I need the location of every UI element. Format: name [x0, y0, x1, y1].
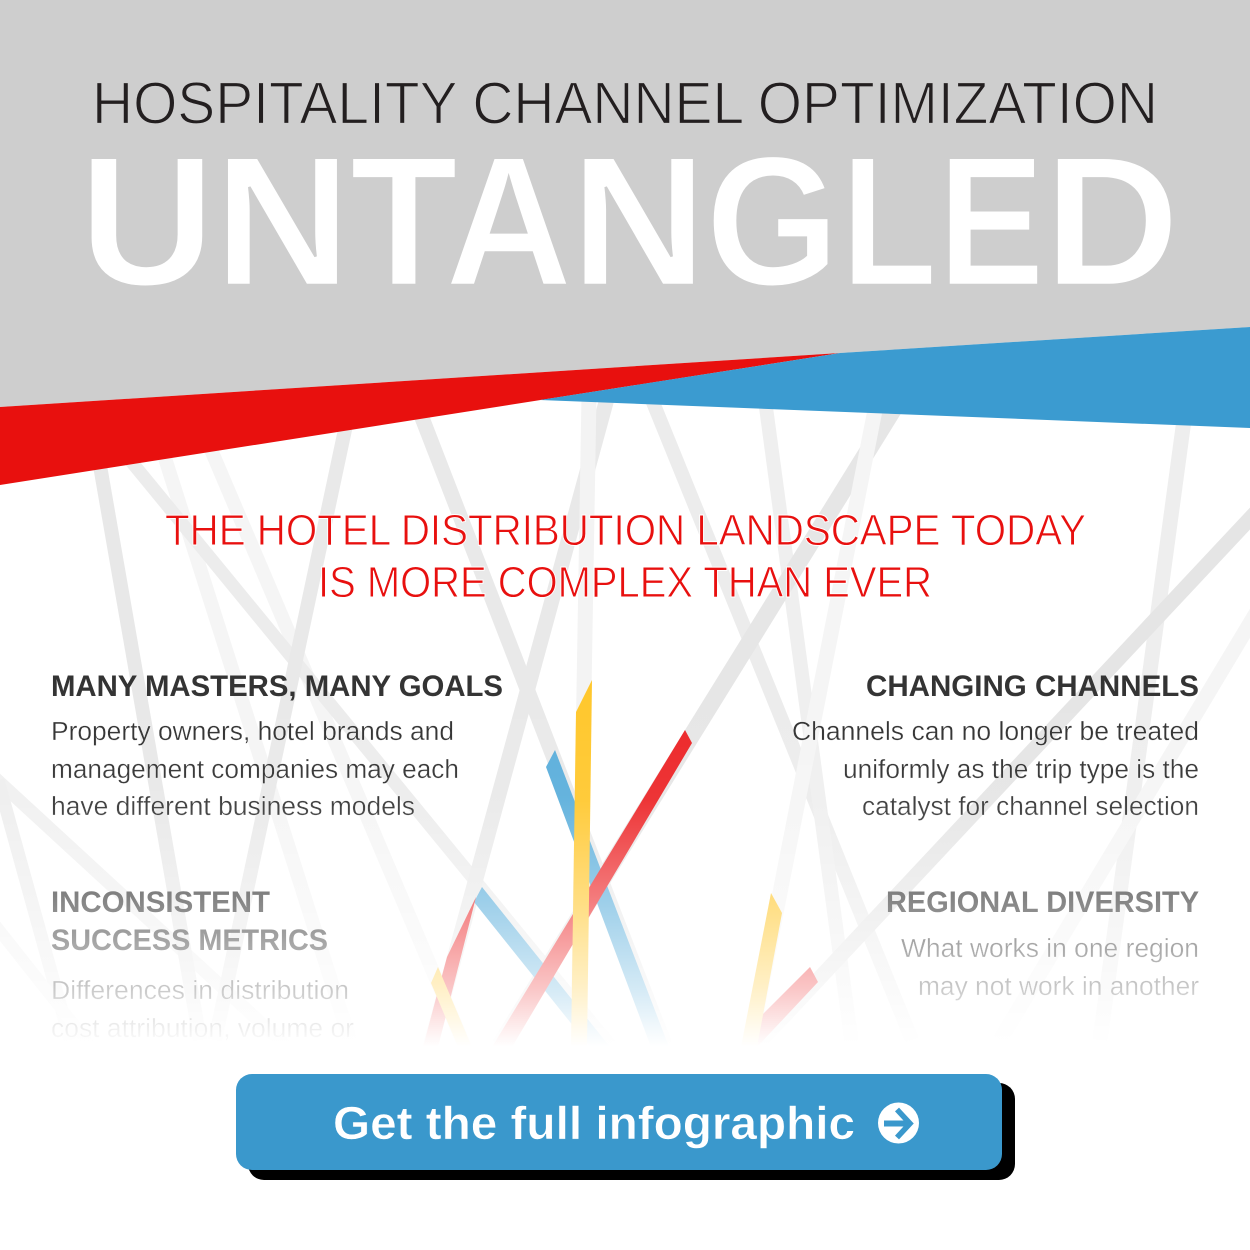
red line long [492, 730, 692, 1047]
body [792, 718, 1199, 821]
body: have different business models [51, 793, 415, 821]
call to action button [236, 1074, 1015, 1180]
yellow line right [741, 893, 782, 1047]
heading: REGIONAL DIVERSITY [886, 886, 1199, 919]
red wedge [0, 353, 840, 485]
section: many masters [51, 670, 503, 821]
red line left [423, 897, 476, 1047]
title main word: N [214, 119, 351, 325]
icon: arrow in circle [878, 1102, 919, 1144]
heading: SUCCESS METRICS [51, 924, 328, 957]
button label: Get the full infographic [333, 1097, 855, 1149]
subheading: THE HOTEL DISTRIBUTION LANDSCAPE TODAY [165, 506, 1086, 555]
title main word: L [841, 119, 937, 325]
heading: MANY MASTERS, MANY GOALS [51, 670, 503, 703]
blue wedge [540, 327, 1250, 428]
coloured untangled lines [423, 680, 818, 1047]
body [901, 935, 1200, 1001]
title line: HOSPITALITY CHANNEL OPTIMIZATION [92, 70, 1158, 136]
subheading: IS MORE COMPLEX THAN EVER [318, 558, 932, 607]
section: regional diversity [886, 886, 1200, 1001]
body: Channels can no longer be treated [792, 718, 1199, 746]
body: may not work in another [918, 973, 1200, 1001]
body: Differences in distribution [51, 977, 349, 1005]
blue line left [474, 887, 610, 1047]
header panel grey [0, 0, 1250, 407]
body: What works in one region [901, 935, 1199, 963]
title main word: D [1044, 119, 1180, 325]
button shadow [248, 1083, 1015, 1180]
heading: INCONSISTENT [51, 886, 270, 919]
body: management companies may each [51, 756, 459, 784]
body: Property owners, hotel brands and [51, 718, 454, 746]
heading: CHANGING CHANNELS [866, 670, 1199, 703]
tangled grey channel lines [0, 395, 1250, 1047]
heading [51, 886, 328, 957]
body: uniformly as the trip type is the [843, 756, 1199, 784]
red line right [755, 967, 818, 1047]
body: cost attribution, volume or [51, 1015, 355, 1043]
body: catalyst for channel selection [862, 793, 1199, 821]
title main word: A [445, 119, 572, 325]
body [51, 718, 459, 821]
subheading [165, 506, 1086, 607]
blue line right [546, 750, 669, 1047]
yellow line centre [571, 680, 592, 1047]
section: changing channels [792, 670, 1199, 821]
body [51, 977, 355, 1043]
title main word: N [571, 119, 707, 325]
yellow line left [431, 967, 472, 1047]
button face [236, 1074, 1002, 1170]
title main word: G [706, 119, 839, 325]
section: inconsistent success metrics [51, 886, 355, 1043]
title main word: E [938, 119, 1044, 325]
white fade overlay [0, 680, 1250, 1052]
title main word: U [79, 119, 215, 325]
title main word: T [350, 119, 458, 325]
